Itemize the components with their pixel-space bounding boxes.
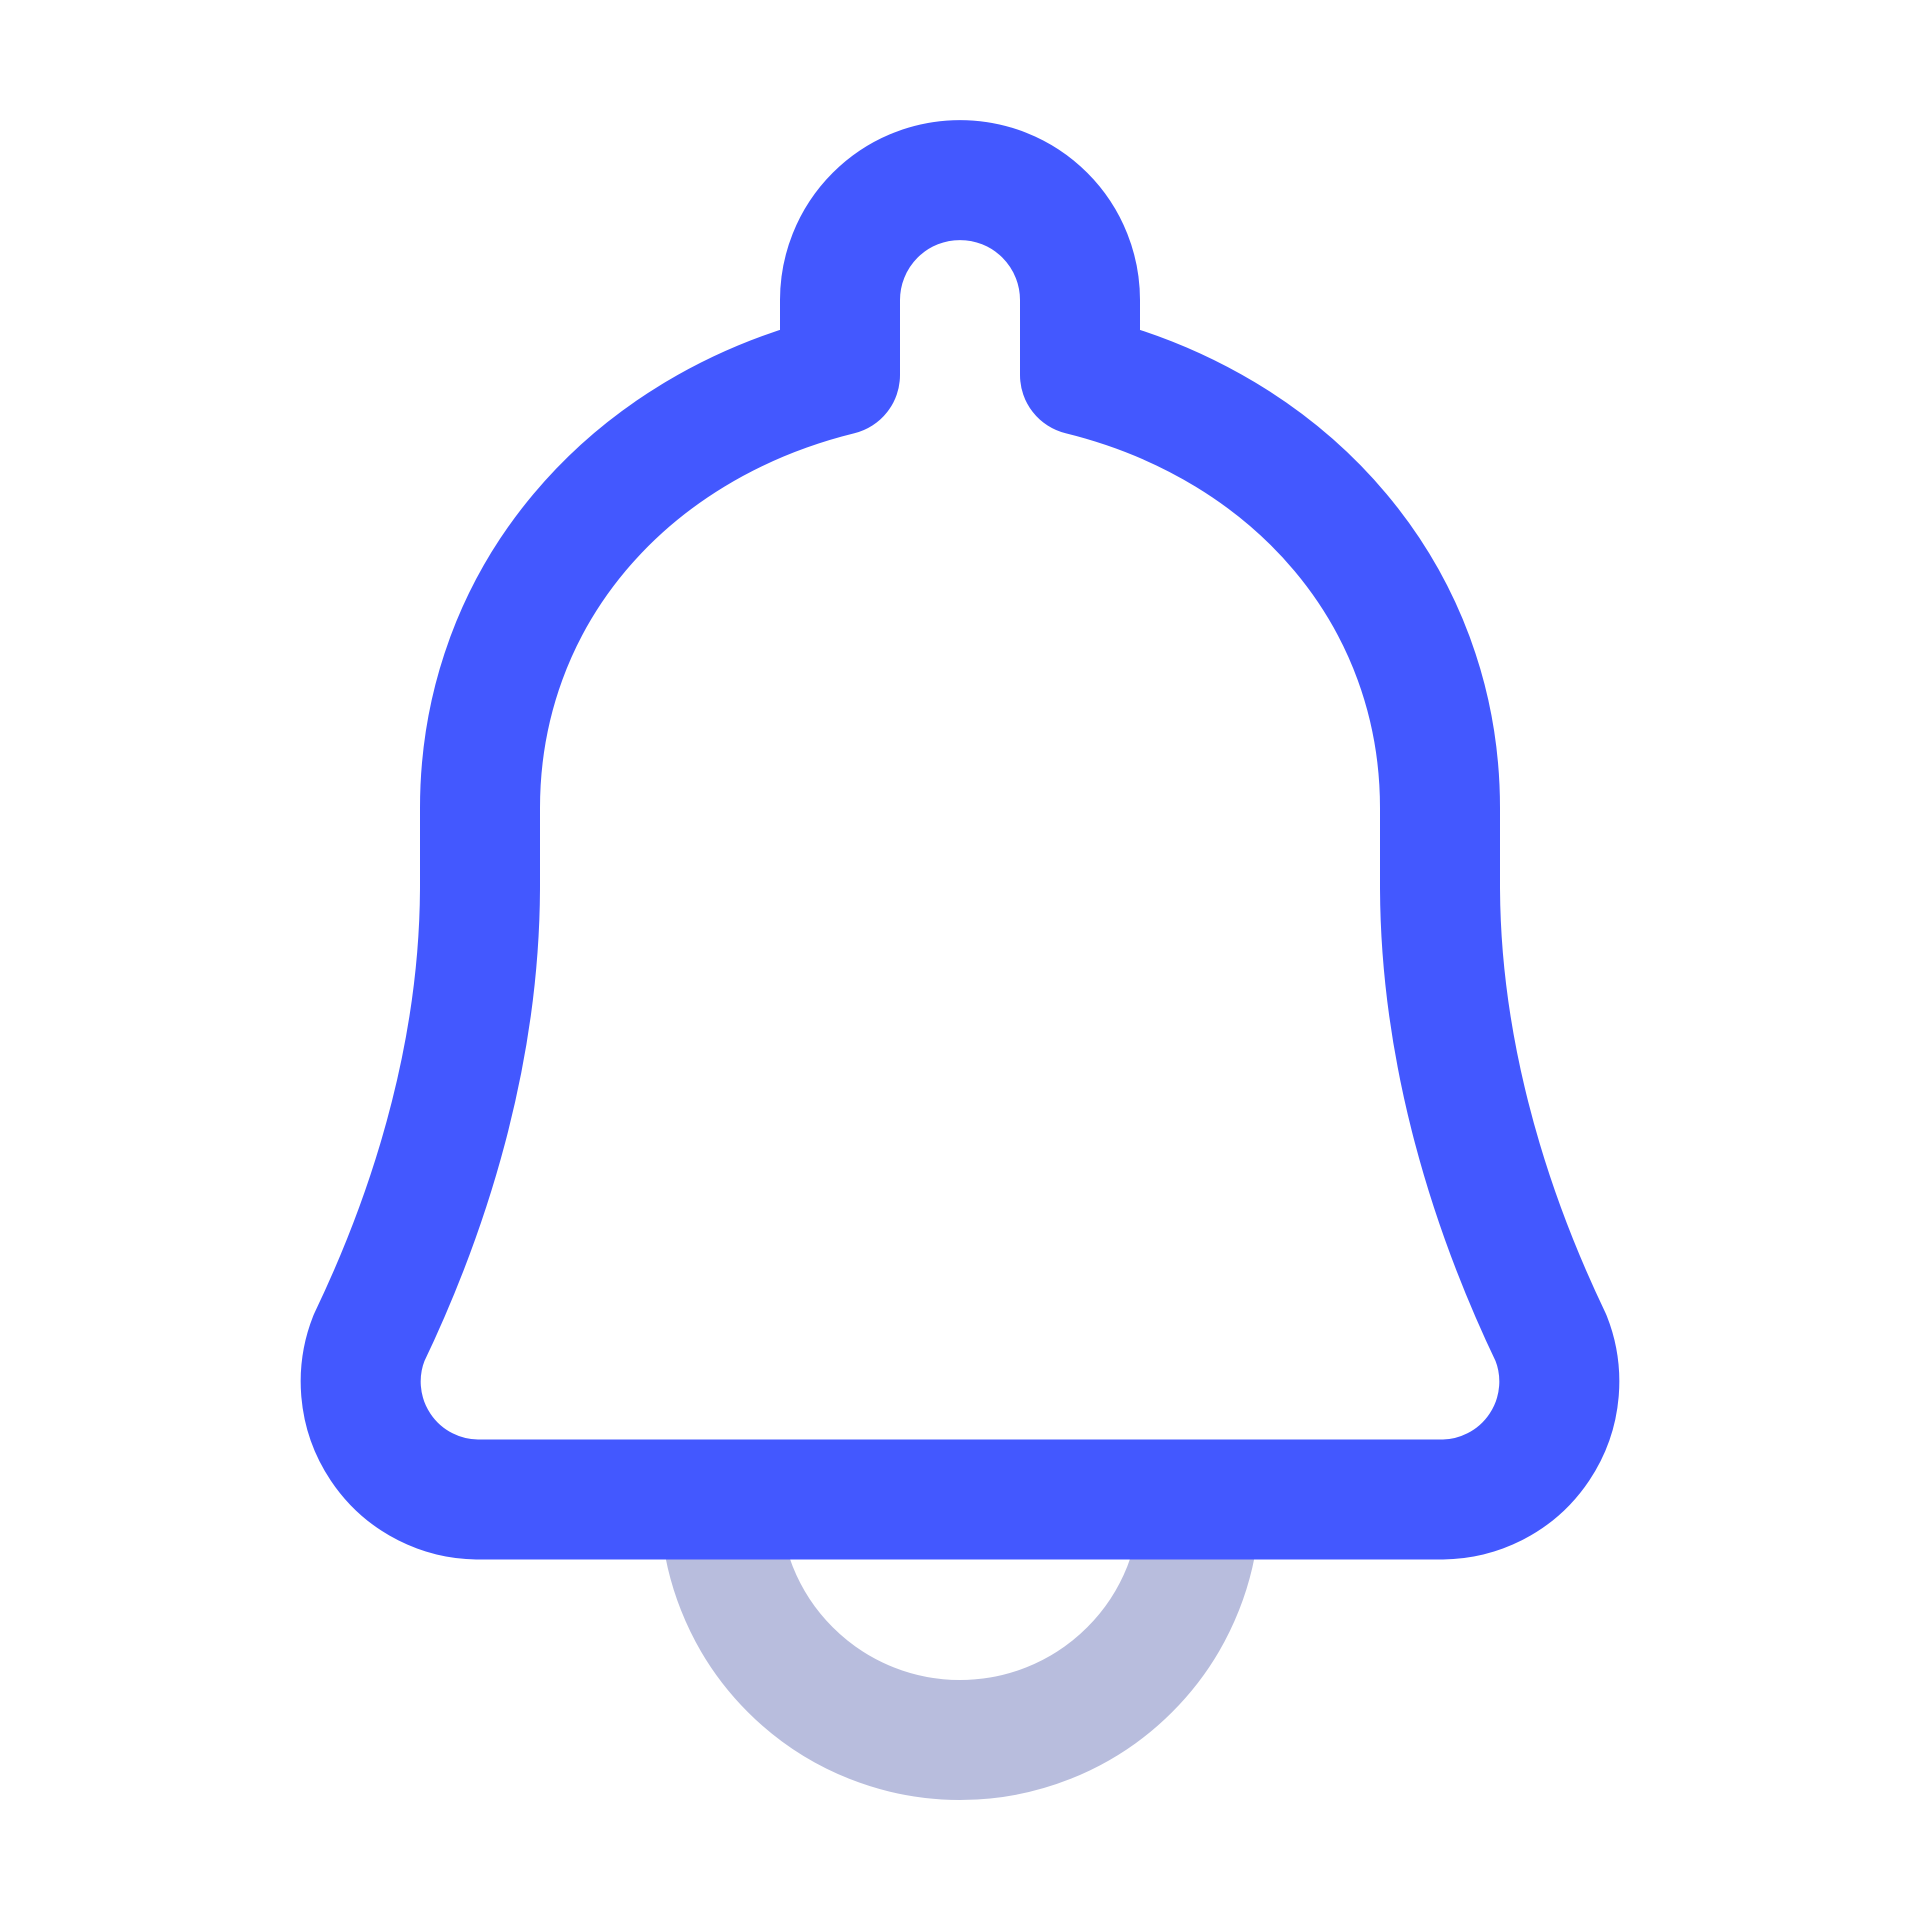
bell body bbox=[361, 180, 1559, 1500]
bell clapper bbox=[720, 1500, 1200, 1740]
